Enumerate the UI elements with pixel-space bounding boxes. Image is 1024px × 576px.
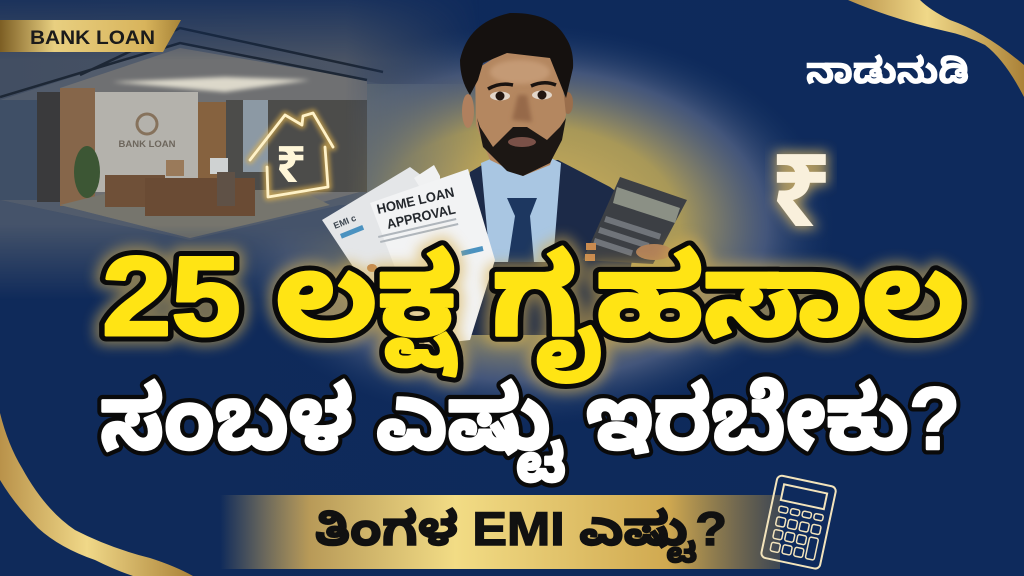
forehead highlight	[490, 60, 550, 84]
documents: EMI c	[332, 213, 358, 231]
office sign	[118, 114, 176, 150]
gold band: ತಿಂಗಳ EMI ಎಷ್ಟು?	[315, 502, 727, 563]
calculator	[583, 177, 687, 264]
brows	[488, 83, 556, 89]
swoosh bottom left	[0, 413, 193, 576]
main headline: 25 ಲಕ್ಷ ಗೃಹಸಾಲ	[102, 234, 964, 382]
eyes	[490, 92, 510, 100]
gold band	[220, 495, 780, 569]
icon: glowing house with rupee: ₹	[276, 136, 306, 194]
right ear	[563, 92, 573, 114]
main headline: 25 ಲಕ್ಷ ಗೃಹಸಾಲ	[102, 234, 964, 382]
beard	[477, 118, 566, 176]
nose shadow	[512, 95, 532, 122]
shirt	[481, 155, 561, 262]
tie	[507, 198, 537, 262]
face	[475, 48, 566, 176]
badge: bank loan	[0, 20, 181, 52]
mouth	[508, 137, 536, 147]
sub headline: ಸಂಬಳ ಎಷ್ಟು ಇರಬೇಕು?	[100, 369, 960, 483]
documents: HOME LOAN	[375, 185, 456, 217]
rupee symbol: ₹	[771, 133, 831, 249]
documents: APPROVAL	[385, 202, 457, 232]
documents	[322, 165, 495, 345]
sub headline: ಸಂಬಳ ಎಷ್ಟು ಇರಬೇಕು?	[100, 369, 960, 483]
icon: calculator outline	[760, 475, 837, 569]
badge: bank loan: BANK LOAN	[30, 27, 155, 49]
hand	[636, 244, 672, 260]
left ear	[462, 94, 474, 128]
suit	[448, 160, 640, 335]
man	[448, 13, 640, 335]
main headline: 25 ಲಕ್ಷ ಗೃಹಸಾಲ	[102, 234, 964, 382]
plant	[74, 146, 100, 198]
hair	[460, 13, 573, 98]
swoosh top right	[848, 0, 1024, 97]
brand name: ನಾಡುನುಡಿ	[806, 50, 969, 91]
office scene	[0, 0, 480, 300]
icon: glowing house with rupee	[250, 113, 333, 197]
office sign: BANK LOAN	[118, 139, 176, 150]
rupee symbol: ₹	[771, 133, 831, 249]
